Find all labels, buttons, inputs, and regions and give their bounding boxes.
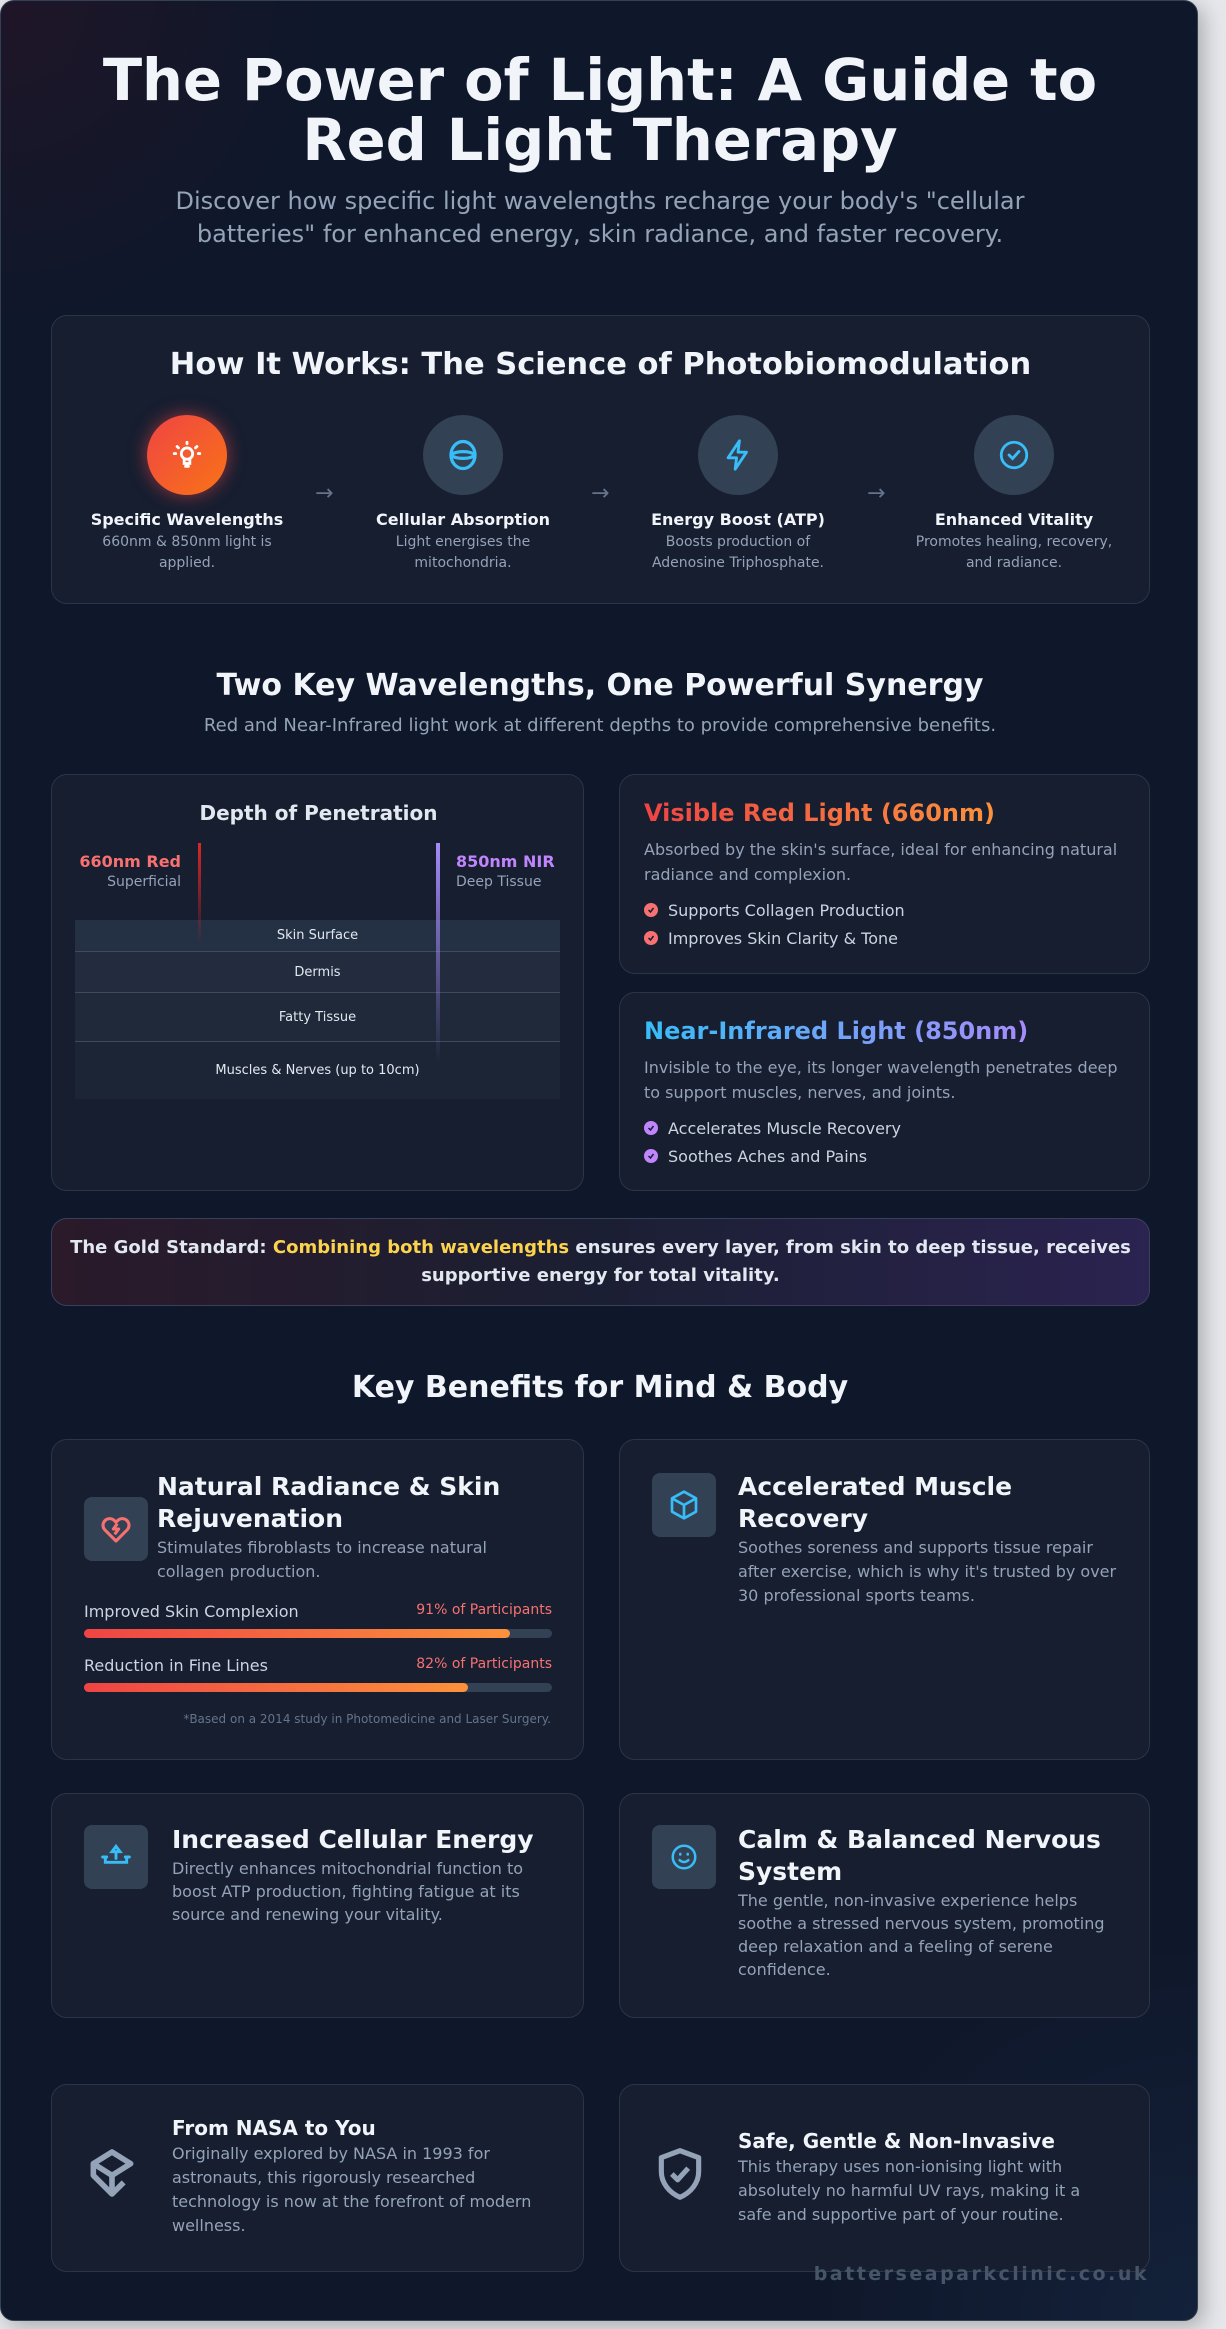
card: cellular energy [51, 1793, 584, 2018]
card: nervous system: Calm & Balanced Nervous System [738, 1825, 1101, 1886]
tissue layers chart [75, 920, 560, 1078]
card: NASA [51, 2084, 584, 2272]
callout: gold standard: The Gold Standard: Combining both wavelengths ensures every layer, from skin to deep tissue, receives supportive energy for total vitality. [70, 1237, 1131, 1286]
step 2 [376, 415, 550, 571]
card: NASA: From NASA to You [172, 2116, 376, 2140]
card: natural radiance: Stimulates fibroblasts to increase natural collagen production. [157, 1538, 487, 1581]
bar chart: fine lines: Reduction in Fine Lines [84, 1656, 268, 1675]
arrow: → [867, 481, 885, 506]
icon: smile [652, 1825, 716, 1889]
card: near infrared: Accelerates Muscle Recovery [668, 1118, 901, 1138]
card: nervous system: The gentle, non-invasive experience helps soothe a stressed nervous system, promoting deep relaxation and a feeling of serene confidence. [738, 1891, 1105, 1979]
step 2: Light energises the [396, 534, 530, 550]
beam: NIR [436, 843, 440, 1063]
step 3: Energy Boost (ATP) [651, 510, 825, 529]
label: 850nm [456, 852, 555, 890]
icon: check circle [974, 415, 1054, 495]
card: muscle recovery [619, 1439, 1150, 1760]
step 4: Enhanced Vitality [935, 510, 1093, 529]
step 2: Cellular Absorption [376, 510, 550, 529]
footer: website: batterseaparkclinic.co.uk [814, 2263, 1149, 2285]
subtitle [176, 187, 1024, 248]
step 1 [91, 402, 283, 571]
card: natural radiance: Natural Radiance & Skin Rejuvenation [157, 1472, 500, 1533]
tissue layers chart: Skin Surface [277, 928, 358, 943]
card: near infrared [619, 992, 1150, 1191]
tissue layers chart: Muscles & Nerves (up to 10cm) [215, 1063, 420, 1078]
step 4: and radiance. [966, 555, 1062, 571]
title [103, 47, 1097, 174]
subheading: Red and Near-Infrared light work at different depths to provide comprehensive benefits. [204, 715, 996, 736]
title: Red Light Therapy [302, 107, 898, 174]
tissue layers chart: Fatty Tissue [279, 1010, 356, 1025]
card: safe [619, 2084, 1150, 2272]
arrow: → [591, 481, 609, 506]
card: nervous system [619, 1793, 1150, 2018]
bar chart: skin complexion: Improved Skin Complexion [84, 1602, 299, 1621]
tissue layers chart: Dermis [294, 965, 341, 980]
step 3: Adenosine Triphosphate. [652, 555, 824, 571]
card: natural radiance [51, 1439, 584, 1760]
step 2: mitochondria. [414, 555, 512, 571]
icon: cube [652, 1473, 716, 1537]
step 1: Specific Wavelengths [91, 510, 283, 529]
panel: depth of penetration [51, 774, 584, 1191]
card: visible red: Visible Red Light (660nm) [644, 799, 995, 827]
footnote: *Based on a 2014 study in Photomedicine and Laser Surgery. [183, 1712, 551, 1726]
icon: light bulb [147, 415, 227, 495]
label: 850nm: 850nm NIR [456, 852, 555, 871]
icon: shield [658, 2148, 702, 2200]
subtitle: batteries" for enhanced energy, skin radiance, and faster recovery. [197, 220, 1003, 248]
bar chart: fine lines [84, 1656, 552, 1675]
card: visible red [619, 774, 1150, 974]
step 3 [651, 415, 825, 571]
icon: bolt [698, 415, 778, 495]
panel: how it works [51, 315, 1150, 604]
step 4 [916, 415, 1112, 571]
card: muscle recovery: Accelerated Muscle Recovery [738, 1472, 1012, 1533]
heading: Depth of Penetration [200, 801, 438, 825]
bar chart: fine lines: 82% of Participants [416, 1656, 552, 1672]
card: safe: Safe, Gentle & Non-Invasive [738, 2129, 1055, 2153]
card: muscle recovery: Soothes soreness and supports tissue repair after exercise, which is why it's trusted by over 30 professional sports teams. [738, 1538, 1116, 1605]
card: visible red: Improves Skin Clarity & Tone [668, 928, 898, 948]
card: near infrared: Soothes Aches and Pains [668, 1146, 867, 1166]
title: The Power of Light: A Guide to [103, 47, 1097, 114]
label: 850nm: Deep Tissue [456, 874, 541, 890]
heading: how it works: How It Works: The Science of Photobiomodulation [170, 347, 1031, 382]
bar chart: skin complexion [84, 1602, 552, 1621]
step 1: 660nm & 850nm light is [102, 534, 272, 550]
step 4: Promotes healing, recovery, [916, 534, 1112, 550]
icon: heart [84, 1497, 148, 1561]
step 1: applied. [159, 555, 215, 571]
subtitle: Discover how specific light wavelengths recharge your body's "cellular [176, 187, 1024, 215]
icon: energy [84, 1825, 148, 1889]
icon: satellite [90, 2149, 134, 2197]
arrow: → [315, 481, 333, 506]
bar chart: skin complexion: 91% of Participants [416, 1602, 552, 1618]
card: visible red: Supports Collagen Production [668, 900, 905, 920]
step 3: Boosts production of [666, 534, 810, 550]
card: cellular energy: Increased Cellular Energy [172, 1825, 534, 1854]
card: NASA: Originally explored by NASA in 1993 for astronauts, this rigorously researched technology is now at the forefront of modern wellness. [172, 2144, 531, 2235]
card: safe: This therapy uses non-ionising light with absolutely no harmful UV rays, making it a safe and supportive part of your routine. [738, 2157, 1080, 2224]
card: near infrared: Near-Infrared Light (850nm) [644, 1017, 1028, 1045]
card: visible red: Absorbed by the skin's surface, ideal for enhancing natural radiance and complexion. [644, 840, 1117, 884]
label: 660nm [79, 852, 181, 890]
heading: key benefits: Key Benefits for Mind & Body [352, 1370, 848, 1405]
card: cellular energy: Directly enhances mitochondrial function to boost ATP production, fighting fatigue at its source and renewing your vitality. [172, 1859, 523, 1924]
heading: two wavelengths: Two Key Wavelengths, One Powerful Synergy [217, 668, 983, 703]
beam: red [198, 843, 201, 945]
callout: gold standard [51, 1218, 1150, 1306]
label: 660nm: 660nm Red [79, 852, 181, 871]
card: near infrared: Invisible to the eye, its longer wavelength penetrates deep to support muscles, nerves, and joints. [644, 1058, 1118, 1102]
icon: mitochondria [423, 415, 503, 495]
label: 660nm: Superficial [107, 874, 181, 890]
